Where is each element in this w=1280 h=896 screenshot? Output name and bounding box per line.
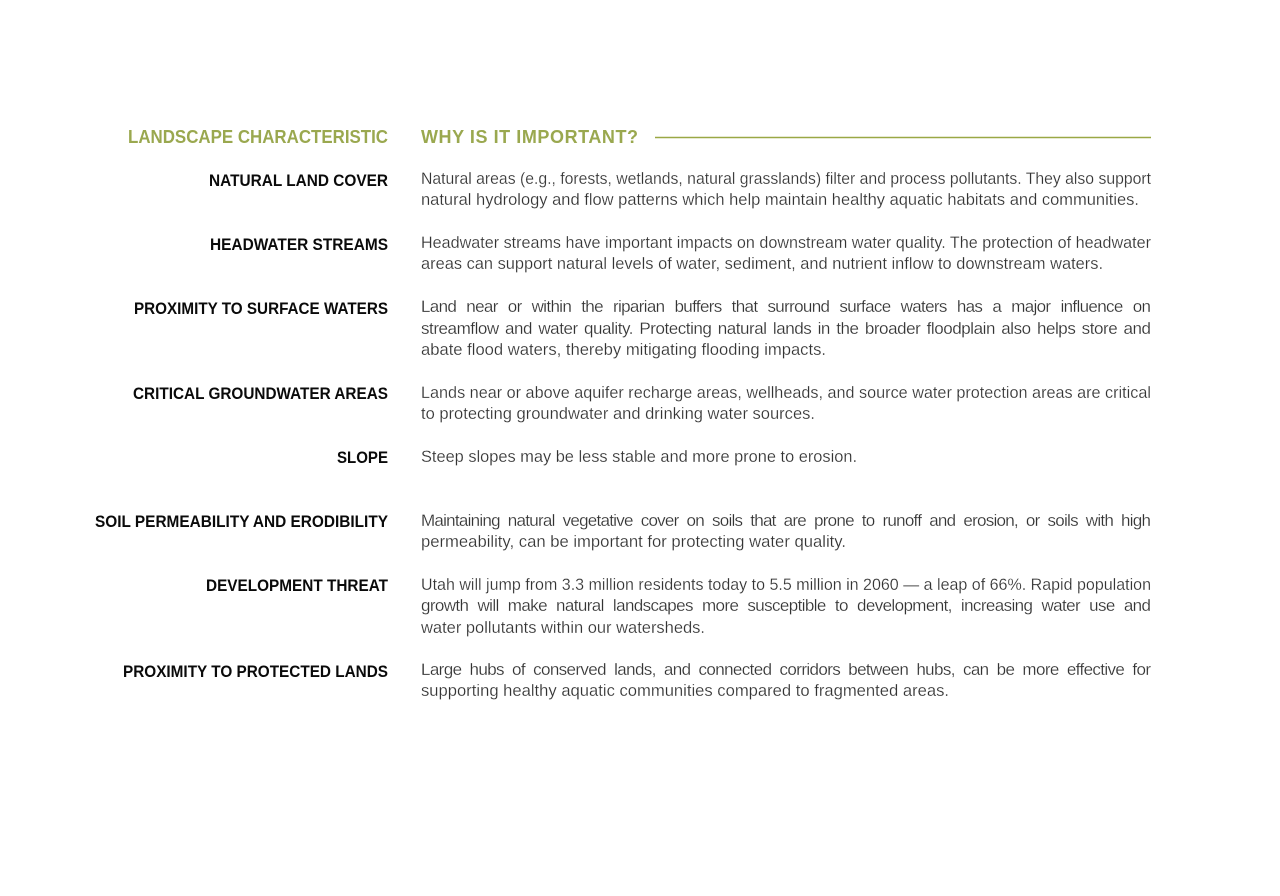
row: critical groundwater areas: Lands near or above aquifer recharge areas, wellheads, and source water protection areas are critical <box>421 383 1151 402</box>
row: development threat <box>206 575 1151 637</box>
row: proximity to protected lands <box>123 660 1151 700</box>
row: proximity to protected lands: Large hubs of conserved lands, and connected corridors between hubs, can be more effective for <box>421 660 1151 679</box>
row: slope: SLOPE <box>337 449 388 467</box>
row: proximity to surface waters: streamflow and water quality. Protecting natural lands in the broader floodplain also helps store and <box>421 319 1151 338</box>
row: proximity to surface waters: PROXIMITY TO SURFACE WATERS <box>134 300 388 318</box>
row: soil permeability and erodibility <box>95 511 1151 551</box>
row: development threat: DEVELOPMENT THREAT <box>206 577 388 595</box>
row: soil permeability and erodibility: SOIL PERMEABILITY AND ERODIBILITY <box>95 513 388 531</box>
row: headwater streams: Headwater streams have important impacts on downstream water quality. The protection of headwater <box>421 233 1151 252</box>
row: development threat: Utah will jump from 3.3 million residents today to 5.5 million in 2060 — a leap of 66%. Rapid population <box>421 575 1151 594</box>
row: critical groundwater areas: to protecting groundwater and drinking water sources. <box>421 404 815 423</box>
row: natural land cover: natural hydrology and flow patterns which help maintain healthy aquatic habitats and communities. <box>421 190 1139 209</box>
row: headwater streams: HEADWATER STREAMS <box>210 236 388 254</box>
row: development threat: water pollutants within our watersheds. <box>420 618 705 637</box>
row: proximity to protected lands: PROXIMITY TO PROTECTED LANDS <box>123 663 388 681</box>
row: proximity to surface waters <box>134 297 1151 359</box>
row: soil permeability and erodibility: permeability, can be important for protecting water quality. <box>421 532 846 551</box>
row: soil permeability and erodibility: Maintaining natural vegetative cover on soils that are prone to runoff and erosion, or soils with high <box>421 511 1151 530</box>
row: headwater streams <box>210 233 1151 273</box>
column heading: why is it important: WHY IS IT IMPORTANT? <box>421 127 638 147</box>
row: proximity to surface waters: abate flood waters, thereby mitigating flooding impacts. <box>421 340 826 359</box>
row: critical groundwater areas: CRITICAL GROUNDWATER AREAS <box>133 385 388 403</box>
row: headwater streams: areas can support natural levels of water, sediment, and nutrient inflow to downstream waters. <box>421 254 1103 273</box>
row: proximity to surface waters: Land near or within the riparian buffers that surround surface waters has a major influence on <box>421 297 1151 316</box>
row: critical groundwater areas <box>133 383 1151 423</box>
row: development threat: growth will make natural landscapes more susceptible to development, increasing water use and <box>421 596 1151 615</box>
column heading: landscape characteristic: LANDSCAPE CHARACTERISTIC <box>128 127 388 147</box>
row: natural land cover <box>209 169 1151 209</box>
row: natural land cover: Natural areas (e.g., forests, wetlands, natural grasslands) filter and process pollutants. They also support <box>421 169 1151 188</box>
row: proximity to protected lands: supporting healthy aquatic communities compared to fragmented areas. <box>421 681 949 700</box>
row: slope: Steep slopes may be less stable and more prone to erosion. <box>421 447 857 466</box>
row: natural land cover: NATURAL LAND COVER <box>209 172 388 190</box>
